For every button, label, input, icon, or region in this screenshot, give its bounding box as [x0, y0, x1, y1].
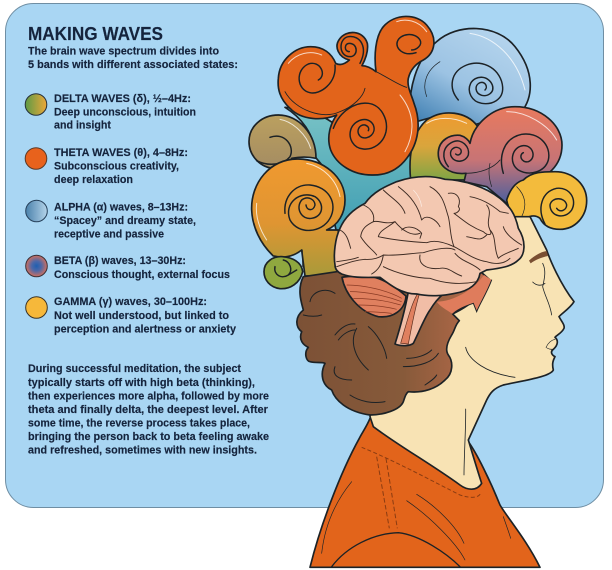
- illustration: brain wave swirls: [249, 16, 587, 276]
- meditation paragraph: During successful meditation, the subject: [28, 363, 241, 375]
- brainstem: [395, 287, 443, 346]
- legend: theta waves: deep relaxation: [54, 174, 133, 186]
- legend: alpha waves: receptive and passive: [54, 228, 164, 240]
- meditation paragraph: theta and finally delta, the deepest level. After: [28, 404, 269, 416]
- swirl: teal backdrop: [285, 107, 413, 233]
- hair strands: [303, 280, 492, 403]
- jaw line: [466, 347, 515, 377]
- legend: delta waves: DELTA WAVES (δ), ½–4Hz:: [54, 93, 191, 105]
- legend: delta waves: and insight: [54, 120, 111, 132]
- swirl: alpha blue: [410, 28, 530, 125]
- meditation paragraph: some time, the reverse process takes place,: [28, 418, 250, 430]
- closed eye: [533, 263, 552, 315]
- intro text: 5 bands with different associated states:: [28, 59, 238, 71]
- neck line: [464, 409, 466, 475]
- cerebrum: [334, 177, 524, 296]
- legend: beta waves: [26, 255, 230, 281]
- legend: alpha waves: ALPHA (α) waves, 8–13Hz:: [54, 202, 188, 214]
- legend: delta waves: [25, 93, 196, 132]
- swirl: gamma yellow: [507, 172, 587, 229]
- legend: beta waves: Conscious thought, external focus: [54, 269, 230, 281]
- reddish hair near the brain: [437, 275, 492, 314]
- swirl: theta big orange: [278, 16, 434, 175]
- legend: theta waves: [25, 147, 188, 186]
- swirl: delta orange-green: [410, 113, 477, 180]
- legend: theta waves: THETA WAVES (θ), 4–8Hz:: [54, 147, 188, 159]
- legend: gamma waves: perception and alertness or anxiety: [54, 324, 236, 336]
- swirl: tan: [249, 115, 316, 168]
- person: shirt: [310, 393, 540, 567]
- swirl: beta pink-purple: [438, 107, 562, 203]
- meditation paragraph: bringing the person back to beta feeling awake: [28, 431, 269, 443]
- meditation paragraph: and refreshed, sometimes with new insights.: [28, 444, 257, 456]
- legend: alpha waves: “Spacey” and dreamy state,: [54, 215, 196, 227]
- legend: theta waves: Subconscious creativity,: [54, 160, 179, 172]
- swirl: small green curl: [264, 257, 303, 289]
- eyebrow: [529, 251, 548, 263]
- legend: alpha waves: [26, 200, 196, 240]
- meditation paragraph: [28, 363, 269, 456]
- lips: [546, 339, 555, 349]
- legend: delta waves: Deep unconscious, intuition: [54, 106, 196, 118]
- brain: [334, 177, 524, 346]
- shirt seams: [362, 447, 481, 528]
- intro text: The brain wave spectrum divides into: [28, 46, 219, 58]
- meditation paragraph: typically starts off with high beta (thinking),: [28, 377, 255, 389]
- cerebellum: [342, 276, 443, 346]
- legend: gamma waves: GAMMA (γ) waves, 30–100Hz:: [54, 296, 207, 308]
- swirl: theta left orange: [252, 159, 345, 276]
- legend: beta waves: BETA (β) waves, 13–30Hz:: [54, 255, 186, 267]
- meditation paragraph: then experiences more alpha, followed by more: [28, 390, 269, 402]
- intro text: [28, 46, 238, 71]
- person: hair: [297, 253, 492, 415]
- legend: gamma waves: [26, 296, 236, 336]
- person: face and neck: [370, 217, 574, 489]
- legend: gamma waves: Not well understood, but linked to: [54, 310, 229, 322]
- shirt folds: [322, 482, 511, 567]
- title: MAKING WAVES: [28, 24, 163, 44]
